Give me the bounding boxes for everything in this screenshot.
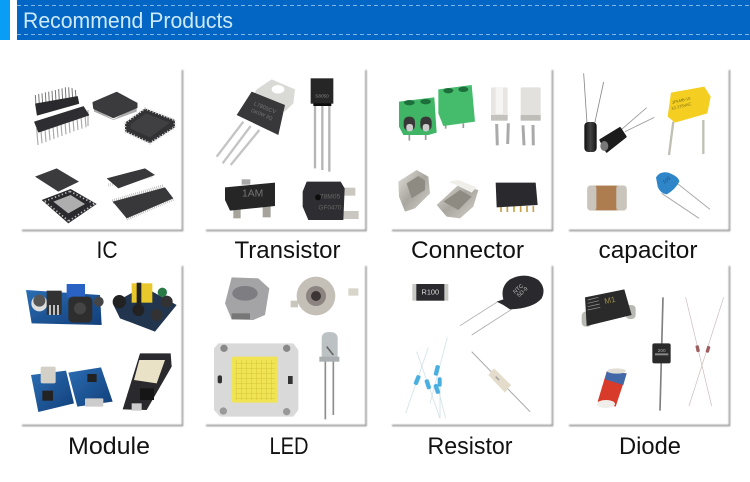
resistor parts: NTC [512, 283, 525, 295]
IC chips [35, 87, 175, 223]
transistor parts [217, 78, 359, 220]
label: LED: LED [270, 433, 308, 460]
panel: Connector [392, 70, 552, 230]
LED parts [214, 277, 358, 419]
header bar [17, 0, 750, 40]
label: Diode: Diode [619, 433, 681, 460]
panel: Resistor [392, 266, 552, 426]
resistor parts: R100 [422, 288, 439, 297]
capacitor parts: X2 275VAC [671, 101, 692, 111]
transistor parts: GF0470 [319, 204, 342, 211]
panel: LED [206, 266, 366, 426]
transistor parts: 78M05 [320, 193, 340, 200]
capacitor parts: 103 [662, 175, 672, 186]
panel: IC [22, 70, 182, 230]
diode parts [582, 289, 724, 411]
panel: Diode [569, 266, 730, 426]
transistor parts: 1AM [242, 189, 263, 200]
header accent block [0, 0, 10, 40]
label: Transistor: Transistor [234, 237, 341, 264]
transistor parts: GK0W 3Q [250, 108, 273, 122]
capacitor parts: JFKMB-10 [671, 95, 692, 105]
resistor parts [406, 276, 544, 418]
transistor parts: S8050 [315, 93, 329, 98]
panel: capacitor [569, 70, 730, 230]
label: capacitor: capacitor [598, 237, 698, 264]
module boards [26, 283, 177, 412]
label: Module: Module [68, 433, 150, 460]
panel: Module [22, 266, 182, 426]
header banner [0, 0, 750, 40]
label: Resistor: Resistor [428, 433, 512, 460]
header title: Recommend Products [23, 8, 233, 33]
diode parts: 200 [658, 348, 666, 353]
capacitor parts [584, 73, 711, 218]
panel: Transistor [206, 70, 366, 230]
connector parts [398, 85, 541, 218]
diode parts: M1 [604, 295, 617, 306]
transistor parts: L7805CV [253, 101, 277, 116]
label: Connector: Connector [411, 237, 524, 264]
label: IC: IC [96, 237, 118, 264]
resistor parts: 5D-9 [516, 286, 529, 299]
